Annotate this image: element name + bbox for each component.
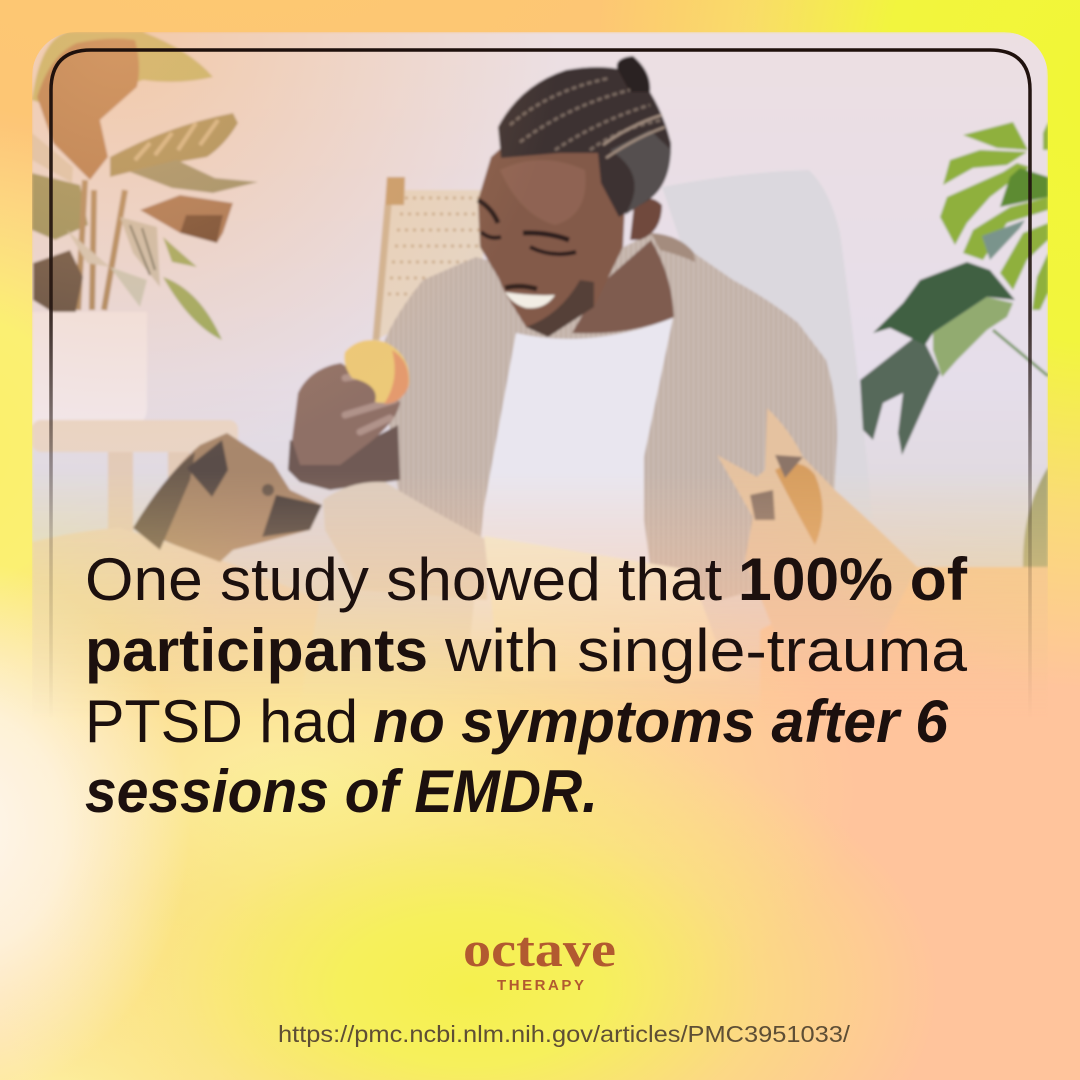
headline text: One study showed that — [85, 546, 722, 613]
icon: apple — [344, 340, 409, 403]
woven chair back — [376, 177, 483, 340]
icon: right dog — [718, 409, 916, 624]
white t-shirt — [470, 318, 673, 640]
man cardigan — [385, 233, 837, 600]
man head and face — [478, 140, 662, 337]
wall — [32, 32, 1048, 688]
headline text: sessions of EMDR. — [85, 758, 598, 825]
icon: white plant pot — [32, 312, 147, 425]
panel: photo of smiling man with apple, dogs and plants — [32, 32, 1048, 688]
man neck — [572, 240, 674, 333]
side table — [32, 420, 238, 532]
man right hand — [323, 482, 487, 600]
finger highlights — [345, 374, 395, 432]
octave therapy logo: THERAPY — [497, 977, 584, 994]
headline text: PTSD had — [85, 688, 358, 755]
icon: left plant foliage — [32, 32, 258, 340]
headline text: no symptoms after 6 — [373, 688, 949, 755]
headline text: participants — [85, 617, 428, 684]
headline text: with single-trauma — [444, 617, 968, 684]
cardigan collar — [651, 233, 695, 262]
icon: left dog — [133, 433, 322, 562]
blanket on chair — [663, 170, 861, 428]
photo warm orange tint — [32, 32, 1048, 592]
icon: right plant monstera — [860, 122, 1048, 567]
man left hand — [292, 363, 400, 465]
cream knit cuff — [484, 536, 711, 639]
man braided hair and bun — [498, 56, 671, 217]
dark shirt sleeve at wrist — [288, 425, 400, 490]
source url: https://pmc.ncbi.nlm.nih.gov/articles/PMC3951033/ — [278, 1021, 851, 1047]
octave therapy logo — [463, 921, 616, 994]
headline text: 100% of — [738, 546, 968, 613]
rounded outline frame — [51, 50, 1030, 720]
sofa — [32, 528, 1048, 688]
apple blush — [384, 350, 409, 404]
octave therapy logo: octave — [463, 921, 616, 977]
